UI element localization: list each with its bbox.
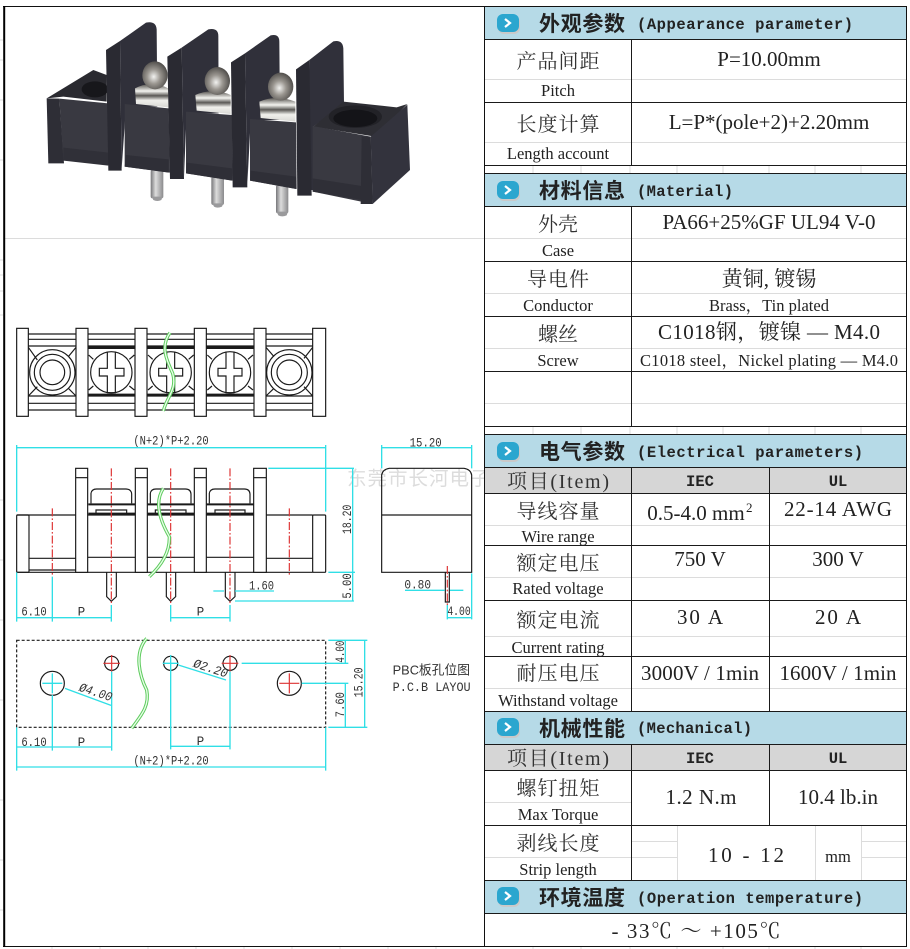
row: pitch: 产品间距 — [516, 50, 600, 73]
screw heads — [88, 489, 254, 514]
row: screw — [537, 320, 898, 370]
dimension labels: P — [197, 604, 204, 619]
heading: material: (Material) — [637, 183, 733, 201]
panel: mechanical — [485, 712, 906, 880]
holes — [40, 655, 301, 695]
row: strip length: 10 - 12 — [708, 843, 784, 867]
PCB caption: PBC板孔位图 — [393, 662, 470, 677]
row: rated voltage: 300 V — [812, 547, 864, 571]
row: strip length: 剥线长度 — [516, 832, 600, 855]
left end circle — [28, 347, 76, 396]
dimension labels: 7.60 — [333, 692, 348, 717]
dimension labels: (N+2)*P+2.20 — [133, 433, 209, 448]
heading: appearance: 外观参数 — [539, 12, 625, 36]
side view: 15.20 — [410, 436, 442, 451]
row: length account: 长度计算 — [516, 113, 600, 136]
dimension labels — [21, 641, 367, 769]
row: current rating — [511, 605, 862, 657]
heading: temperature: (Operation temperature) — [637, 890, 863, 908]
panel: operation temperature — [485, 881, 906, 943]
heading: mechanical — [485, 712, 906, 744]
dimension labels: 6.10 — [21, 604, 47, 619]
row: screw: C1018钢，镀镍 — M4.0 — [658, 320, 880, 345]
row: max torque: 螺钉扭矩 — [516, 777, 600, 800]
dimension labels: 15.20 — [352, 667, 367, 697]
row: wire range — [516, 497, 892, 546]
row: withstand voltage: Withstand voltage — [498, 691, 618, 710]
heading: material: 材料信息 — [539, 179, 625, 203]
heading: electrical: (Electrical parameters) — [637, 444, 863, 462]
table header row — [485, 744, 906, 770]
panel: electrical parameters — [485, 434, 906, 712]
row: current rating: 20 A — [815, 605, 862, 629]
heading: appearance: (Appearance parameter) — [637, 16, 853, 34]
heading: material — [485, 174, 906, 206]
table header row: UL — [829, 473, 847, 491]
row: case: 外壳 — [538, 213, 578, 236]
row: screw: Screw — [537, 351, 579, 370]
row: withstand voltage — [498, 661, 897, 710]
row: current rating: 额定电流 — [516, 609, 600, 632]
dimension labels: 5.00 — [340, 573, 355, 599]
row: rated voltage: Rated voltage — [512, 579, 604, 598]
row: withstand voltage: 耐压电压 — [516, 662, 600, 685]
table header row: 项目(Item) — [507, 747, 609, 770]
right end circle — [266, 347, 313, 396]
row: max torque — [516, 777, 878, 824]
row: conductor: 导电件 — [527, 268, 589, 291]
dimension labels: 18.20 — [340, 505, 355, 534]
table header row: IEC — [686, 750, 714, 768]
dimension labels: (N+2)*P+2.20 — [133, 754, 209, 769]
dimension labels: P — [78, 735, 85, 750]
side view: 4.00 — [447, 604, 471, 619]
row: strip length: Strip length — [519, 860, 597, 879]
dimension labels — [21, 433, 355, 619]
row: strip length: mm — [825, 847, 851, 866]
dimension labels: Ø4.00 — [76, 680, 114, 705]
side view: 0.80 — [404, 577, 431, 592]
row: current rating: 30 A — [677, 605, 724, 629]
row: wire range: 导线容量 — [516, 500, 600, 523]
row: case: Case — [542, 241, 574, 260]
table header row: IEC — [686, 473, 714, 491]
row: current rating: Current rating — [511, 638, 605, 657]
row: wire range: Wire range — [521, 527, 595, 546]
row: withstand voltage: 1600V / 1min — [780, 661, 897, 685]
dimension labels: 1.60 — [249, 578, 274, 593]
heading: temperature — [485, 881, 906, 913]
temperature value: - 33℃ ～ +105℃ — [612, 919, 780, 943]
dimension labels: Ø2.20 — [191, 656, 230, 682]
row: conductor: Brass，Tin plated — [709, 296, 830, 315]
row: screw: C1018 steel，Nickel plating — M4.0 — [640, 351, 898, 370]
heading: temperature: 环境温度 — [539, 887, 625, 910]
table header row — [485, 467, 906, 493]
row: max torque: Max Torque — [518, 805, 598, 824]
row: screw: 螺丝 — [538, 323, 578, 346]
panel: appearance parameter — [485, 7, 906, 166]
row: max torque: 10.4 lb.in — [798, 785, 878, 809]
table header row: UL — [829, 750, 847, 768]
break mark — [132, 638, 147, 728]
pins — [107, 572, 235, 601]
row: strip length — [516, 832, 851, 879]
table header row: 项目(Item) — [507, 470, 609, 493]
row: wire range: 22-14 AWG — [784, 497, 892, 521]
PCB caption — [393, 662, 471, 696]
heading: electrical: 电气参数 — [539, 440, 625, 464]
row: withstand voltage: 3000V / 1min — [641, 661, 760, 685]
dimension lines — [17, 445, 355, 622]
row: conductor: Conductor — [523, 296, 593, 315]
side view — [382, 436, 472, 619]
dimension labels: 4.00 — [333, 641, 348, 663]
break mark — [163, 333, 174, 411]
heading: mechanical: 机械性能 — [539, 718, 625, 741]
barriers — [17, 328, 326, 416]
barriers — [76, 468, 266, 572]
row: pitch: Pitch — [541, 81, 576, 100]
watermark text: 东莞市长河电子有限公司 — [347, 468, 573, 490]
dimension labels: P — [78, 604, 85, 619]
product photo: terminal block — [47, 22, 410, 216]
dimension labels: 6.10 — [21, 735, 47, 750]
row: rated voltage: 额定电压 — [516, 552, 600, 575]
row: length account: Length account — [507, 144, 609, 163]
panel: material — [485, 174, 906, 426]
heading: mechanical: (Mechanical) — [637, 720, 752, 738]
row: pitch: P=10.00mm — [717, 47, 821, 71]
row: length account — [507, 110, 869, 163]
dimension labels: P — [197, 734, 204, 749]
row: conductor — [523, 267, 830, 315]
front view drawing — [17, 433, 472, 622]
row: wire range: 0.5-4.0 mm — [647, 501, 745, 525]
dimension lines — [17, 640, 367, 771]
row: max torque: 1.2 N.m — [666, 785, 736, 809]
break mark — [149, 488, 169, 577]
top view drawing — [17, 328, 326, 416]
row: rated voltage — [512, 547, 864, 598]
heading: appearance — [485, 7, 906, 39]
row: case — [538, 210, 875, 260]
row: conductor: 黄铜, 镀锡 — [722, 267, 816, 291]
row: length account: L=P*(pole+2)+2.20mm — [669, 110, 869, 134]
PCB caption: P.C.B LAYOU — [393, 681, 471, 696]
centre lines — [52, 468, 289, 605]
row: wire range: 2 — [746, 500, 752, 515]
heading: electrical — [485, 435, 906, 467]
row: case: PA66+25%GF UL94 V-0 — [663, 210, 875, 234]
PCB layout drawing — [17, 638, 471, 771]
row: pitch — [516, 47, 821, 100]
screws — [89, 352, 253, 393]
row: rated voltage: 750 V — [674, 547, 726, 571]
